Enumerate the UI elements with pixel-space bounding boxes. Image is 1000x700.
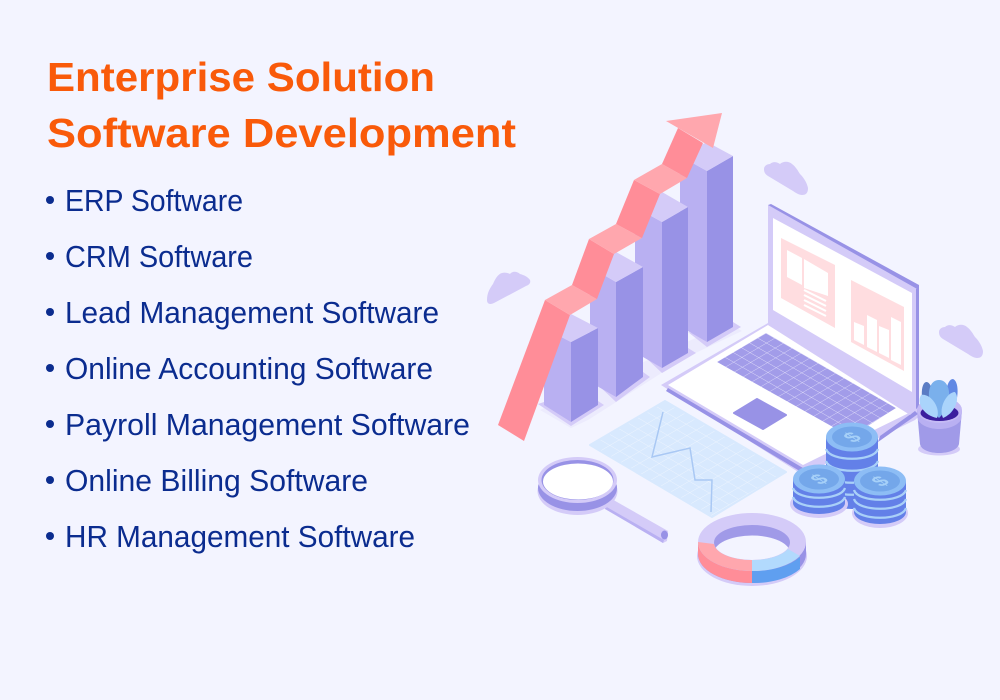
bullet list: software types: Online Accounting Software <box>65 352 433 386</box>
screen panel: bar graph <box>851 280 904 371</box>
icon: cloud left <box>487 272 530 304</box>
icon: cloud right <box>939 325 983 358</box>
keyboard <box>717 333 896 427</box>
bullet list: software types <box>46 184 470 554</box>
bullet list: software types: Online Billing Software <box>65 464 368 498</box>
title <box>47 54 516 156</box>
donut pink segment <box>698 542 752 583</box>
bullet list: software types: CRM Software <box>65 240 253 274</box>
back coin stack: $ <box>838 429 867 446</box>
laptop <box>661 204 925 475</box>
icon: magnifying glass <box>538 457 668 543</box>
donut chart <box>697 513 807 586</box>
title: Software Development <box>47 110 516 156</box>
icon: coin stacks <box>790 422 908 528</box>
bullet list: software types: ERP Software <box>65 184 243 218</box>
left coin stack: $ <box>805 471 834 488</box>
chart paper <box>590 401 786 517</box>
laptop screen <box>773 218 912 392</box>
bar 3 <box>635 192 696 373</box>
title: Enterprise Solution <box>47 54 435 100</box>
floor band under the bars <box>540 323 742 428</box>
bar 4 <box>680 142 741 347</box>
laptop lid <box>768 204 919 415</box>
laptop base <box>661 323 925 475</box>
magnifier handle <box>605 498 668 543</box>
donut blue segment <box>752 557 800 583</box>
arrow: rising red ribbon <box>498 113 722 441</box>
screen panel: page layout <box>781 238 835 328</box>
bar 1 <box>538 314 604 426</box>
bar chart <box>538 142 741 426</box>
bullet list: software types: Lead Management Software <box>65 296 439 330</box>
icon: potted plant <box>917 379 962 456</box>
right coin stack: $ <box>866 473 895 490</box>
chart paper line <box>652 412 712 512</box>
icon: cloud top <box>764 162 808 195</box>
bullet list: software types: HR Management Software <box>65 520 415 554</box>
bullet list: software types: Payroll Management Software <box>65 408 470 442</box>
infographic canvas <box>46 62 983 586</box>
bar 2 <box>590 252 650 402</box>
trackpad <box>734 399 786 429</box>
